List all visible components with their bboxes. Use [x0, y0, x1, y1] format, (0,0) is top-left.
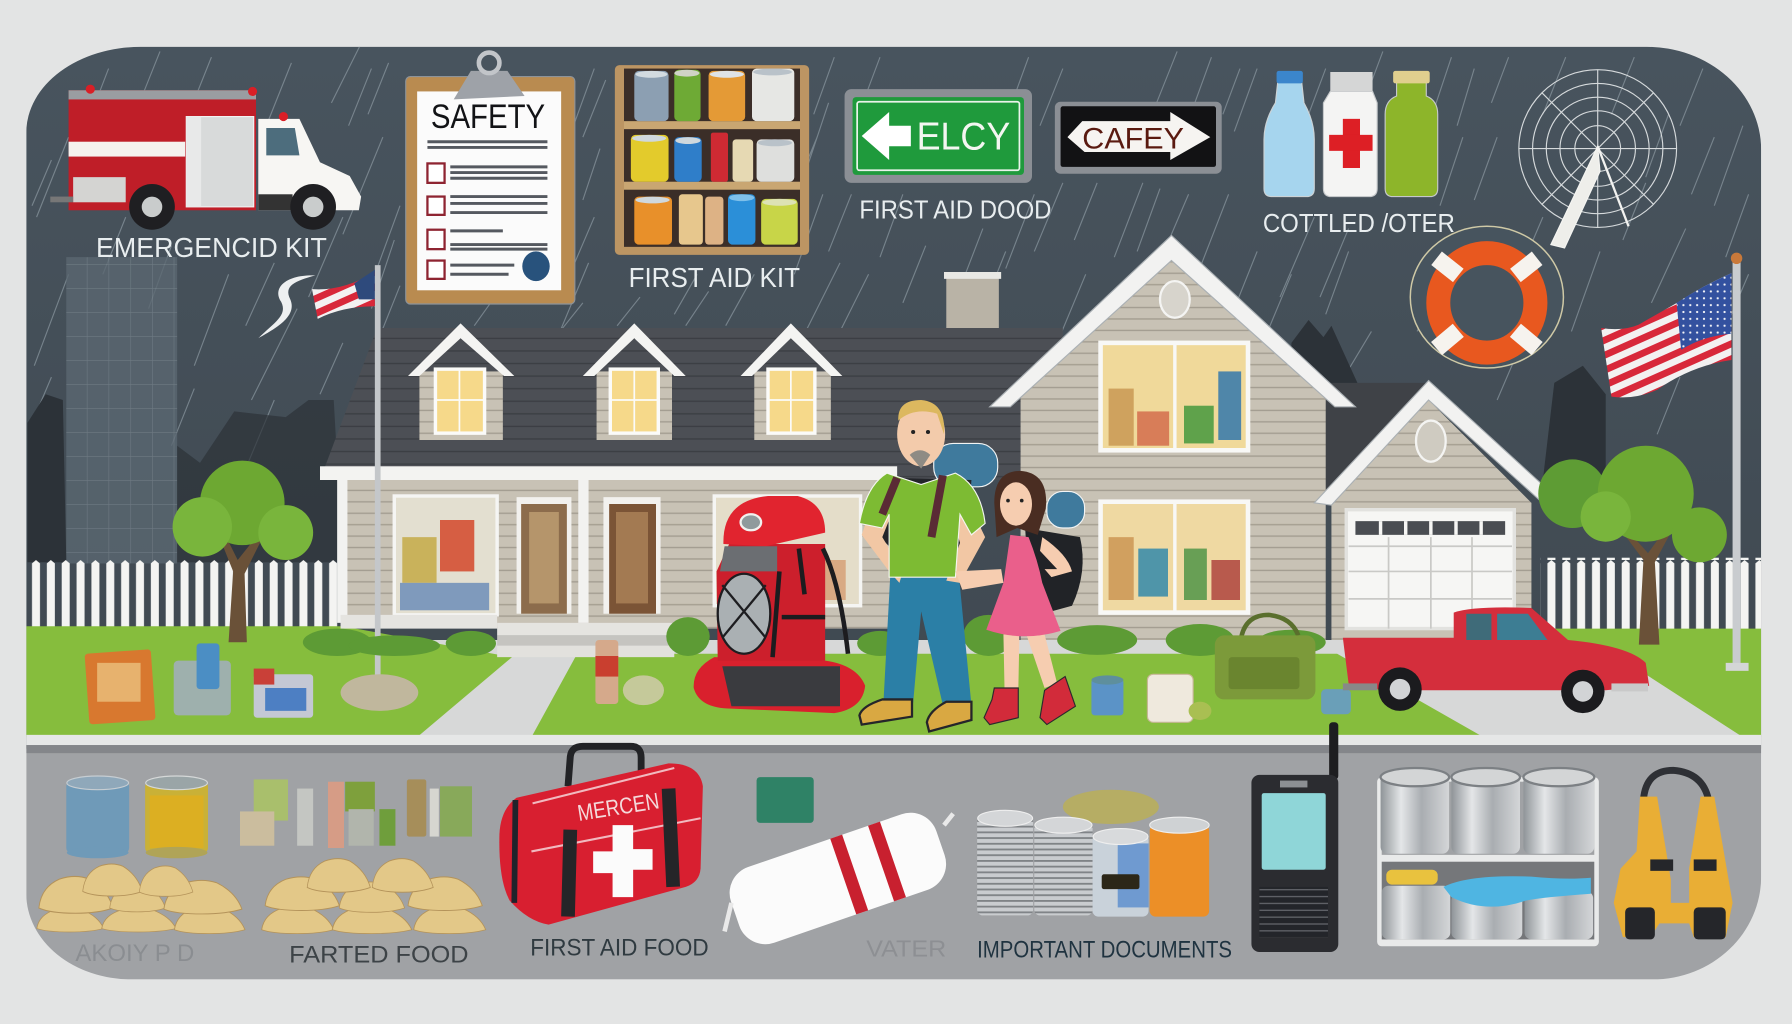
- yellow contents: [1386, 870, 1438, 885]
- porch window with supplies: [394, 496, 497, 615]
- checklist rows: [427, 142, 547, 279]
- gable wing wall: [1021, 257, 1326, 640]
- black direction sign: [1055, 102, 1222, 174]
- upper window with supplies: [1101, 343, 1248, 450]
- dormer right: [741, 323, 842, 440]
- green road sign: [845, 89, 1032, 183]
- girl bedroll: [1047, 491, 1085, 528]
- main roof: [320, 328, 1063, 480]
- red hiking backpack: [694, 496, 865, 713]
- girl boots: [984, 677, 1075, 725]
- backpack top lid: [723, 496, 825, 546]
- garage roof: [1314, 381, 1562, 505]
- case label: MERCEN: [576, 787, 661, 826]
- label: first aid kit: FIRST AID KIT: [629, 262, 800, 293]
- dark skyline silhouettes: [27, 320, 1606, 562]
- man bedroll: [934, 443, 998, 487]
- garage wall: [1331, 400, 1531, 640]
- label can: [1093, 829, 1149, 917]
- supply: stacked cans: [977, 790, 1209, 917]
- storm sky: [23, 46, 1771, 749]
- gray supply band: [23, 745, 1771, 985]
- man arms: [862, 503, 985, 583]
- label: water faint: VATER: [866, 936, 946, 962]
- case straps: [568, 789, 673, 917]
- green packet: [757, 777, 814, 823]
- cans: top row: [634, 69, 794, 121]
- lawn supplies left: [85, 643, 418, 725]
- red pickup truck: [1343, 607, 1649, 713]
- radio badge: [1280, 781, 1307, 787]
- cans: middle row: [631, 133, 794, 182]
- girl with backpack: [955, 471, 1085, 725]
- girl pink dress: [986, 535, 1061, 636]
- yellow safety harness vest: [1614, 770, 1733, 939]
- girl head: [994, 471, 1046, 537]
- man with backpack: [859, 400, 998, 731]
- flag cloth: [1601, 273, 1731, 397]
- girl arm holding hands: [955, 569, 1003, 590]
- dormer left: [408, 323, 514, 440]
- house: [320, 235, 1562, 657]
- white wind swoosh: [258, 275, 315, 338]
- ambulance: [50, 85, 361, 230]
- garage vent: [1416, 421, 1446, 462]
- label: farted food: FARTED FOOD: [289, 941, 469, 968]
- scraps: [1189, 702, 1211, 720]
- clipboard safety checklist: [406, 53, 575, 304]
- blue contents: [1443, 876, 1591, 907]
- lawn supplies centre: [595, 640, 664, 705]
- radio antenna: [1329, 722, 1338, 779]
- lawn: right: [1555, 628, 1762, 737]
- supply: food packets: [240, 779, 472, 848]
- girl far arm: [1040, 537, 1072, 577]
- white picket fence left: [27, 560, 343, 631]
- white picket fence right: [1541, 558, 1763, 631]
- rack cans bottom: [1382, 886, 1593, 939]
- sidewalk strip: [23, 735, 1771, 745]
- green juice bottle: [1385, 71, 1438, 197]
- radio body: [1251, 775, 1338, 952]
- bedroll tie: [725, 814, 953, 931]
- backpack body: [717, 544, 825, 661]
- porch beam: [320, 466, 897, 480]
- banded can 1: [977, 810, 1033, 915]
- label: important documents: IMPORTANT DOCUMENTS: [977, 937, 1232, 964]
- case body: [499, 763, 703, 925]
- man shirt: [859, 473, 985, 577]
- girl backpack: [1025, 528, 1083, 611]
- flagpole: [1726, 253, 1749, 671]
- emergency radio: [1251, 722, 1338, 952]
- pantry shelf of cans: [615, 65, 809, 255]
- front door left: [517, 497, 571, 614]
- small packet: [1321, 689, 1351, 714]
- case white cross: [593, 825, 653, 897]
- chimney: [944, 272, 1001, 345]
- supply: two cans: [66, 776, 208, 858]
- canned goods rack: [1377, 768, 1599, 946]
- gable vent: [1160, 281, 1190, 318]
- dormer middle: [583, 323, 686, 440]
- banded can 2: [1034, 817, 1093, 915]
- kerb: [23, 745, 1771, 753]
- rain streaks: [32, 34, 1749, 469]
- background skyscraper: [66, 257, 177, 563]
- rack cans top: [1381, 768, 1594, 854]
- blue can: [1091, 675, 1123, 715]
- front door right: [603, 497, 661, 614]
- backpack base roll: [694, 657, 865, 713]
- yellow wrapped food: [1063, 790, 1159, 824]
- cans: bottom row: [634, 194, 798, 245]
- right trees: [1538, 446, 1727, 645]
- porch columns: [337, 480, 589, 623]
- case handle: [568, 746, 641, 786]
- glass jar: [1147, 674, 1193, 722]
- red first aid case: [499, 746, 703, 925]
- orange can: [1150, 817, 1209, 917]
- life ring: [1410, 226, 1563, 368]
- girl legs: [1003, 634, 1057, 691]
- lawn: [23, 626, 1766, 737]
- label: bottled water: COTTLED /OTER: [1263, 208, 1455, 238]
- backpack grey panel: [718, 574, 770, 654]
- lawn: left: [23, 626, 512, 737]
- man boots: [859, 699, 971, 731]
- supply: sandbag pile left: [37, 864, 245, 934]
- left tree: [173, 461, 313, 642]
- radio speaker: [1259, 887, 1328, 937]
- left flagpole with flag: [312, 265, 381, 686]
- porch steps: [497, 623, 674, 657]
- white bedroll bandage: [722, 805, 954, 952]
- garage door: [1346, 510, 1514, 629]
- label: first aid food: FIRST AID FOOD: [530, 934, 709, 961]
- porch window right: [714, 496, 861, 606]
- man head: [897, 400, 945, 469]
- label: first aid food: FIRST AID DOOD: [859, 194, 1051, 224]
- panel: supply shelf ground: [23, 745, 1771, 985]
- seal: [522, 251, 550, 281]
- lawn: centre: [531, 654, 1483, 737]
- man backpack straps: [882, 475, 943, 537]
- fan / web radar: [1519, 70, 1677, 248]
- white medicine bottle: [1323, 72, 1377, 197]
- lawn supplies right: [1091, 615, 1351, 722]
- ground floor wall: [341, 478, 901, 629]
- green road sign: ELCY: [917, 116, 1010, 159]
- radio screen: [1262, 793, 1326, 870]
- black direction sign: CAFEY: [1082, 123, 1184, 156]
- backpack side straps: [773, 549, 848, 657]
- clipboard clip: [454, 53, 525, 99]
- porch foundation: [341, 615, 497, 629]
- american flag right: [1601, 253, 1749, 671]
- gable roof: [990, 235, 1355, 407]
- blue water bottle: [1264, 71, 1314, 197]
- backpack lid badge: [741, 514, 761, 530]
- backpack grey pocket top: [720, 546, 777, 571]
- label: safety food faint: AKOIY P D: [75, 940, 194, 967]
- lower window with supplies: [1101, 502, 1248, 613]
- label: emergency kit: EMERGENCID KIT: [96, 232, 327, 263]
- man backpack: [880, 478, 971, 560]
- clipboard heading: SAFETY: [431, 98, 545, 136]
- green duffel bag: [1215, 615, 1315, 699]
- bottled water: [1264, 71, 1438, 197]
- garage connecting roof: [1314, 383, 1429, 503]
- shrubs along house: [303, 615, 1326, 656]
- supply: sandbag pile right: [262, 859, 486, 934]
- man legs: [883, 575, 971, 705]
- paved ground base: [420, 640, 1740, 735]
